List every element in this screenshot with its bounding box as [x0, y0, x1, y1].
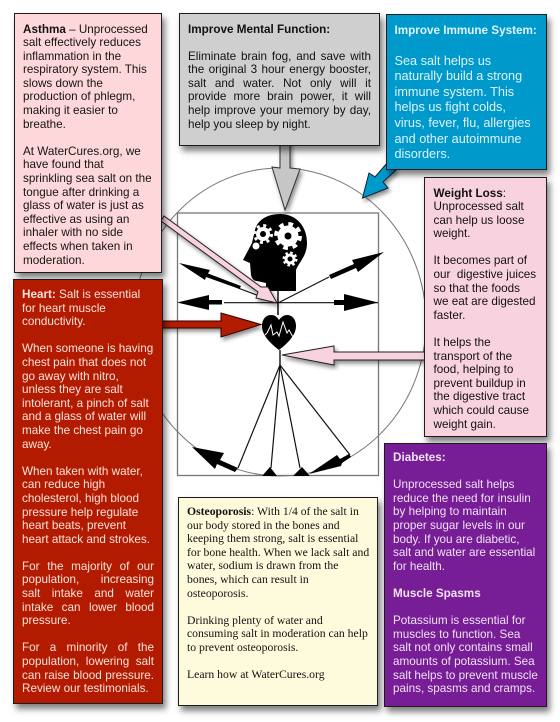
text: improve immune system: immune system. This [394, 85, 514, 99]
text: weight loss: transport of the [434, 350, 512, 363]
text: asthma [23, 22, 152, 267]
text: diabetes and muscle spasms: Potassium is essential for [393, 614, 526, 627]
text: heart: can reduce high [22, 478, 105, 491]
text: asthma: tongue after drinking a [23, 186, 139, 199]
text: asthma: inhaler with no side [23, 226, 123, 239]
panel: asthma [14, 13, 162, 273]
text: asthma: respiratory system. This [23, 63, 147, 76]
text: heart: intolerant, a pinch of salt [22, 397, 149, 410]
text: heart: population, lowering salt [22, 655, 154, 668]
text: heart: conductivity. [22, 315, 85, 328]
text: weight loss: prevent buildup in [434, 377, 526, 390]
panel: heart [13, 279, 163, 704]
text: heart: Review our testimonials. [22, 682, 149, 695]
text: heart: For the majority of our [22, 560, 154, 573]
text: asthma: effective as using an [23, 213, 129, 226]
text: improve mental function: Improve Mental Function: [188, 22, 330, 36]
text: weight loss: so that the foods [434, 282, 520, 295]
text: heart: For a minority of the [22, 641, 154, 654]
text: weight loss: It helps the [434, 336, 491, 349]
text: heart: population, increasing [22, 573, 154, 586]
text: asthma: moderation. [23, 254, 85, 267]
text: asthma: Asthma – Unprocessed [23, 22, 148, 36]
square outline [178, 213, 378, 476]
text: heart: and a glass of water will [22, 410, 146, 423]
text: asthma: inflammation in the [23, 50, 121, 63]
text: osteoporosis: our body stored in the bones and [187, 519, 340, 532]
text: diabetes and muscle spasms: pains, spasms and cramps. [393, 682, 535, 695]
text: improve immune system: virus, fever, flu, allergies [394, 116, 531, 130]
text: asthma: breathe. [23, 118, 66, 131]
text: improve immune system: Sea salt helps us [394, 54, 491, 68]
stick figure body lines [224, 277, 378, 468]
text: improve immune system: helps us fight colds, [394, 100, 506, 114]
text: osteoporosis: for bone health. When we lack salt and [187, 546, 369, 559]
text: weight loss: which could cause [434, 404, 529, 417]
text: weight loss: the digestive tract [434, 390, 525, 403]
text: heart: chest pain that does not [22, 356, 146, 369]
text: weight loss: weight. [434, 227, 471, 240]
text: diabetes and muscle spasms: salt and water are essential [393, 546, 535, 559]
text: diabetes and muscle spasms: muscles to function. Sea [393, 628, 520, 641]
text: weight loss: our digestive juices [434, 268, 536, 281]
text: asthma: slows down the [23, 77, 103, 90]
text: improve immune system: disorders. [394, 147, 450, 161]
text: osteoporosis: to prevent osteoporosis. [187, 641, 298, 654]
text: heart: pressure help regulate [22, 506, 138, 518]
text: asthma: At WaterCures.org, we [23, 145, 141, 158]
text: diabetes and muscle spasms: Muscle Spasms [393, 587, 481, 600]
text: weight loss: Weight Loss: [434, 186, 506, 200]
text: diabetes and muscle spasms: proper sugar levels in our [393, 519, 525, 532]
text: heart: go away with nitro, [22, 370, 119, 383]
text: osteoporosis [187, 505, 370, 681]
text: improve mental function: Eliminate brain fog, and save with [188, 50, 371, 63]
text: asthma: glass of water is just as [23, 199, 144, 212]
text: improve mental function: provide more brain power, it will [188, 90, 371, 103]
text: diabetes and muscle spasms: for health. [393, 560, 445, 573]
text: improve mental function: salt and water. Not only will it [188, 77, 371, 90]
text: osteoporosis: Drinking plenty of water and [187, 614, 323, 627]
text: weight loss: can help us loose [434, 214, 524, 227]
text: diabetes and muscle spasms: by helping to maintain [393, 505, 507, 518]
text: osteoporosis: consuming salt in moderation can help [187, 627, 368, 640]
text: improve immune system: and other autoimmune [394, 132, 521, 146]
arrow: asthma to chest [161, 216, 277, 303]
text: weight loss: we eat are digested [434, 295, 536, 308]
text: asthma: salt effectively reduces [23, 36, 141, 49]
text: asthma: sprinkling sea salt on the [23, 172, 152, 185]
text: improve immune system: Improve Immune System: [394, 24, 537, 36]
text: diabetes and muscle spasms: Unprocessed salt helps [393, 478, 514, 491]
text: heart: When taken with water, [22, 465, 143, 478]
panel: improve immune system [386, 14, 547, 170]
text: diabetes and muscle spasms: reduce the need for insulin [393, 492, 531, 505]
arrow: heart panel to heart [160, 313, 261, 337]
text: weight loss: faster. [434, 309, 465, 322]
text: diabetes and muscle spasms: Diabetes: [393, 451, 446, 464]
text: heart: intake can lower blood [22, 601, 154, 614]
limb arrows [177, 252, 384, 476]
text: heart: cholesterol, high blood [22, 492, 139, 505]
text: heart: for heart muscle [22, 302, 106, 315]
text: improve mental function: help improve your memory by day, [188, 104, 371, 117]
text: osteoporosis: bones, which can result in [187, 573, 309, 586]
text: weight loss [434, 186, 536, 431]
text: osteoporosis: Learn how at WaterCures.org [187, 668, 325, 681]
arrow: mental function to head [272, 140, 300, 210]
arrow: weight loss to stomach [282, 346, 430, 365]
text: improve mental function [188, 22, 371, 131]
text: osteoporosis: keeping them strong, salt is essential [187, 532, 358, 545]
text: diabetes and muscle spasms: salt not only contains small [393, 641, 533, 654]
text: diabetes and muscle spasms [393, 451, 538, 695]
text: heart: away. [22, 438, 52, 451]
icon: heart with pulse [262, 315, 296, 350]
text: improve mental function: help you sleep by night. [188, 118, 311, 131]
text: heart [22, 288, 154, 695]
text: asthma: have found that [23, 158, 104, 171]
text: heart: make the chest pain go [22, 424, 143, 437]
text: diabetes and muscle spasms: body. If you are diabetic, [393, 533, 519, 546]
text: weight loss: food, helping to [434, 363, 513, 376]
circle outline [134, 168, 426, 476]
panel: weight loss [424, 177, 547, 437]
text: heart: heart beats, prevent [22, 519, 126, 532]
text: diabetes and muscle spasms: amounts of potassium. Sea [393, 655, 535, 668]
arrow: immune system to circle [362, 162, 396, 198]
panel: osteoporosis [178, 497, 378, 706]
panel: improve mental function [179, 13, 380, 146]
text: improve immune system: naturally build a strong [394, 69, 522, 83]
text: osteoporosis: osteoporosis. [187, 587, 248, 600]
icon: head with gears [243, 214, 307, 291]
text: heart: salt intake and water [22, 587, 154, 600]
text: heart: can raise blood pressure. [22, 669, 154, 682]
text: heart: unless they are salt [22, 383, 123, 396]
text: heart: When someone is having [22, 342, 153, 355]
text: heart: Heart: Salt is essential [22, 288, 140, 301]
text: asthma: making it easier to [23, 104, 118, 117]
text: asthma: effects when taken in [23, 240, 133, 253]
text: heart: heart attack and strokes. [22, 533, 150, 546]
text: improve immune system [394, 24, 537, 161]
text: osteoporosis: Osteoporosis: With 1/4 of the salt in [187, 505, 359, 518]
text: weight loss: weight gain. [434, 418, 496, 431]
text: osteoporosis: water, sodium is drawn from the [187, 559, 338, 572]
text: improve mental function: the original 3 hour energy booster, [188, 63, 371, 76]
text: asthma: production of phlegm, [23, 90, 135, 103]
text: weight loss: Unprocessed salt [434, 200, 524, 213]
panel: diabetes and muscle spasms [384, 443, 547, 707]
text: diabetes and muscle spasms: salt helps to prevent muscle [393, 668, 538, 682]
text: weight loss: It becomes part of [434, 254, 527, 267]
text: heart: pressure. [22, 614, 71, 627]
